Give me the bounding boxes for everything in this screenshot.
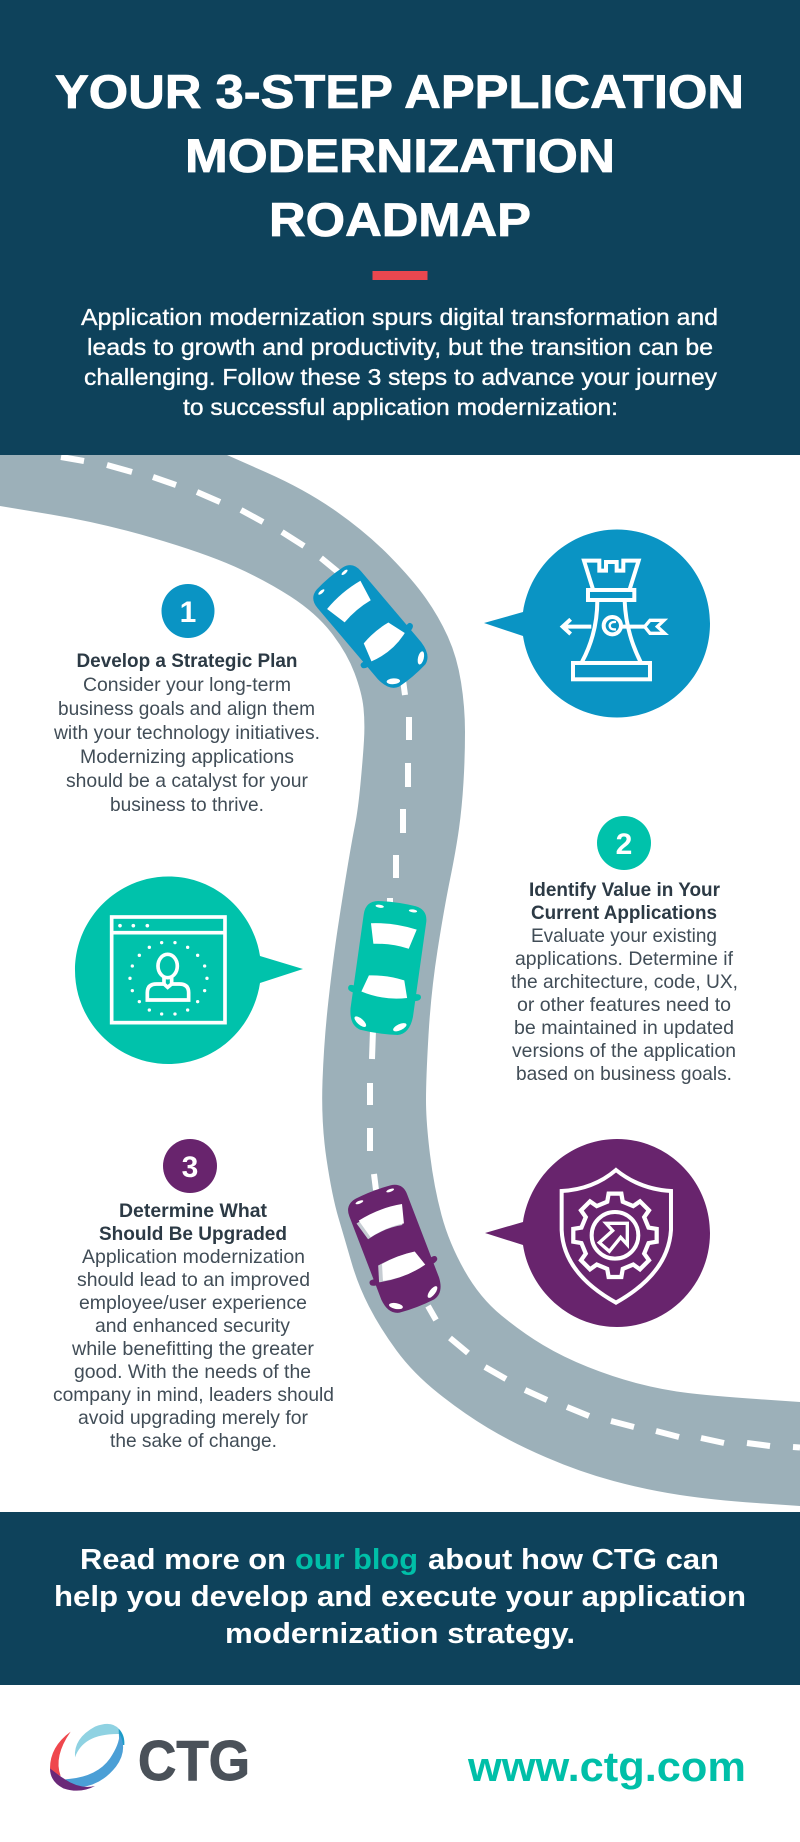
banner call to action text: our blog [295,1544,418,1576]
icon: browser user [112,917,225,1023]
intro paragraph [81,304,718,420]
banner call to action text: Read more on [80,1544,286,1576]
step 3 heading: Determine What [119,1200,267,1222]
number badge 3: 3 [182,1151,198,1184]
icon: rook with arrow [563,561,665,679]
step 1 description: business to thrive. [110,794,264,816]
step 2 heading: Identify Value in Your [529,879,720,901]
step 2 description: Evaluate your existing [531,925,717,947]
step 3 description: the sake of change. [110,1430,277,1452]
step 2 description: or other features need to [517,994,731,1016]
step 3 description: should lead to an improved [77,1269,310,1291]
step 3 description: good. With the needs of the [74,1361,311,1383]
CTG logo [50,1724,250,1793]
callout: browser window with user icon [75,876,303,1064]
step 3 description: while benefitting the greater [71,1338,315,1360]
step 3 heading [99,1200,287,1245]
step 3 heading: Should Be Upgraded [99,1223,287,1245]
number badge 1 [162,584,214,638]
step 1 description: should be a catalyst for your [66,770,308,792]
number badge 3 [163,1139,217,1193]
callout: chess rook strategy icon [484,530,710,718]
car 1: blue [304,556,438,698]
logo wordmark: CTG [138,1729,250,1793]
number badge 2: 2 [616,828,632,861]
step 1 description [53,674,320,816]
number badge 1: 1 [180,596,196,629]
step 2 description: be maintained in updated [514,1017,734,1039]
step 2 description: based on business goals. [516,1063,732,1085]
number badge 2 [597,816,651,870]
callout: shield with gear icon [485,1139,710,1327]
step 3 description: company in mind, leaders should [53,1384,334,1406]
step 3 description [53,1246,334,1452]
step 3 description: avoid upgrading merely for [78,1407,308,1429]
intro paragraph: leads to growth and productivity, but the transition can be [87,334,713,360]
car 2: teal [342,898,434,1038]
step 1 description: Modernizing applications [80,746,294,768]
title [55,65,744,246]
title: MODERNIZATION [185,129,615,182]
website url: www.ctg.com [467,1743,746,1790]
intro paragraph: to successful application modernization: [183,394,618,420]
step 1 text block [53,584,320,816]
banner call to action text: about how CTG can [428,1544,719,1576]
car 3: purple [339,1178,451,1320]
banner call to action text [54,1544,746,1650]
title: YOUR 3-STEP APPLICATION [55,65,744,118]
step 1 description: Consider your long-term [83,674,291,696]
step 2 description: versions of the application [512,1040,736,1062]
intro paragraph: challenging. Follow these 3 steps to advance your journey [84,364,718,390]
step 2 text block [511,816,738,1085]
step 2 description: applications. Determine if [515,948,734,970]
header panel [0,0,800,455]
road [0,455,800,1506]
intro paragraph: Application modernization spurs digital transformation and [81,304,718,330]
step 3 text block [53,1139,334,1452]
footer banner [0,1512,800,1685]
step 3 description: employee/user experience [79,1292,307,1314]
step 1 heading: Develop a Strategic Plan [76,650,298,672]
red accent bar [372,271,428,280]
banner call to action text: modernization strategy. [225,1618,575,1650]
step 2 description: the architecture, code, UX, [511,971,738,993]
step 2 heading: Current Applications [531,902,717,924]
logo mark [50,1724,124,1791]
title: ROADMAP [269,193,531,246]
step 3 description: Application modernization [82,1246,305,1268]
banner call to action text: help you develop and execute your application [54,1581,746,1613]
step 1 description: business goals and align them [58,698,315,720]
step 2 heading [529,879,720,924]
icon: shield gear arrow [562,1170,671,1303]
step 2 description [511,925,738,1085]
step 1 description: with your technology initiatives. [53,722,320,744]
step 3 description: and enhanced security [95,1315,290,1337]
